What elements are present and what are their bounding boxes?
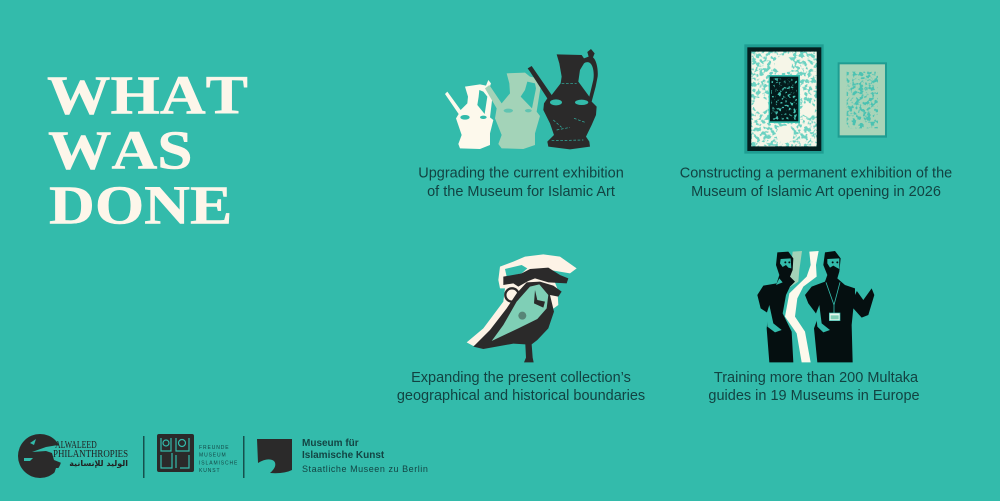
title (47, 64, 248, 236)
logo: Museum für Islamische Kunst (257, 438, 428, 474)
logo: Freunde Museum Islamische Kunst: MUSEUM (199, 452, 227, 458)
logo: Freunde Museum Islamische Kunst: ISLAMISCHE (199, 460, 238, 466)
left guide (757, 252, 795, 362)
logo: Museum für Islamische Kunst: Staatliche Museen zu Berlin (302, 464, 428, 474)
title: WHAT (47, 64, 248, 126)
logo: Alwaleed Philanthropies: PHILANTHROPIES (53, 450, 128, 460)
divider line (243, 436, 244, 478)
caption: training: guides in 19 Museums in Europe (708, 388, 920, 404)
caption: constructing: Museum of Islamic Art opening in 2026 (691, 184, 941, 200)
title: WAS (48, 119, 193, 181)
small page (838, 62, 887, 138)
white strip (785, 251, 819, 362)
caption: expanding: Expanding the present collection’s (411, 370, 631, 386)
badge (829, 313, 840, 321)
caption: upgrading: of the Museum for Islamic Art (427, 184, 615, 200)
divider line (143, 436, 144, 478)
logo: Alwaleed Philanthropies: الوليد للإنسانية (69, 459, 128, 468)
sage strip (775, 251, 802, 300)
caption: expanding: geographical and historical boundaries (397, 388, 645, 404)
logo: Freunde Museum Islamische Kunst: FREUNDE (199, 445, 229, 451)
caption: upgrading: Upgrading the current exhibition (418, 166, 624, 182)
white jug (445, 80, 493, 149)
caption: constructing: Constructing a permanent exhibition of the (680, 166, 952, 182)
bird body (473, 282, 562, 362)
sage jug (485, 73, 541, 149)
logo: Museum für Islamische Kunst: Museum für (302, 438, 359, 449)
logo: Alwaleed Philanthropies (18, 434, 128, 480)
icon: bird (467, 254, 577, 362)
icon: guides (757, 251, 874, 362)
logo: Freunde Museum Islamische Kunst: KUNST (199, 468, 220, 474)
title: DONE (49, 174, 232, 236)
right guide (805, 251, 874, 362)
bird shadow (467, 254, 577, 346)
icon: three jugs (445, 49, 598, 149)
bird wing (492, 284, 548, 341)
dark jug (528, 49, 598, 149)
large page (744, 44, 824, 154)
icon: manuscript pages (744, 44, 887, 154)
logo: Museum für Islamische Kunst: Islamische Kunst (302, 450, 385, 461)
logo: Alwaleed Philanthropies: ALWALEED (55, 439, 97, 450)
bird bow (503, 268, 568, 287)
logo: Freunde Museum Islamische Kunst (157, 434, 238, 474)
caption: training: Training more than 200 Multaka (714, 370, 919, 386)
